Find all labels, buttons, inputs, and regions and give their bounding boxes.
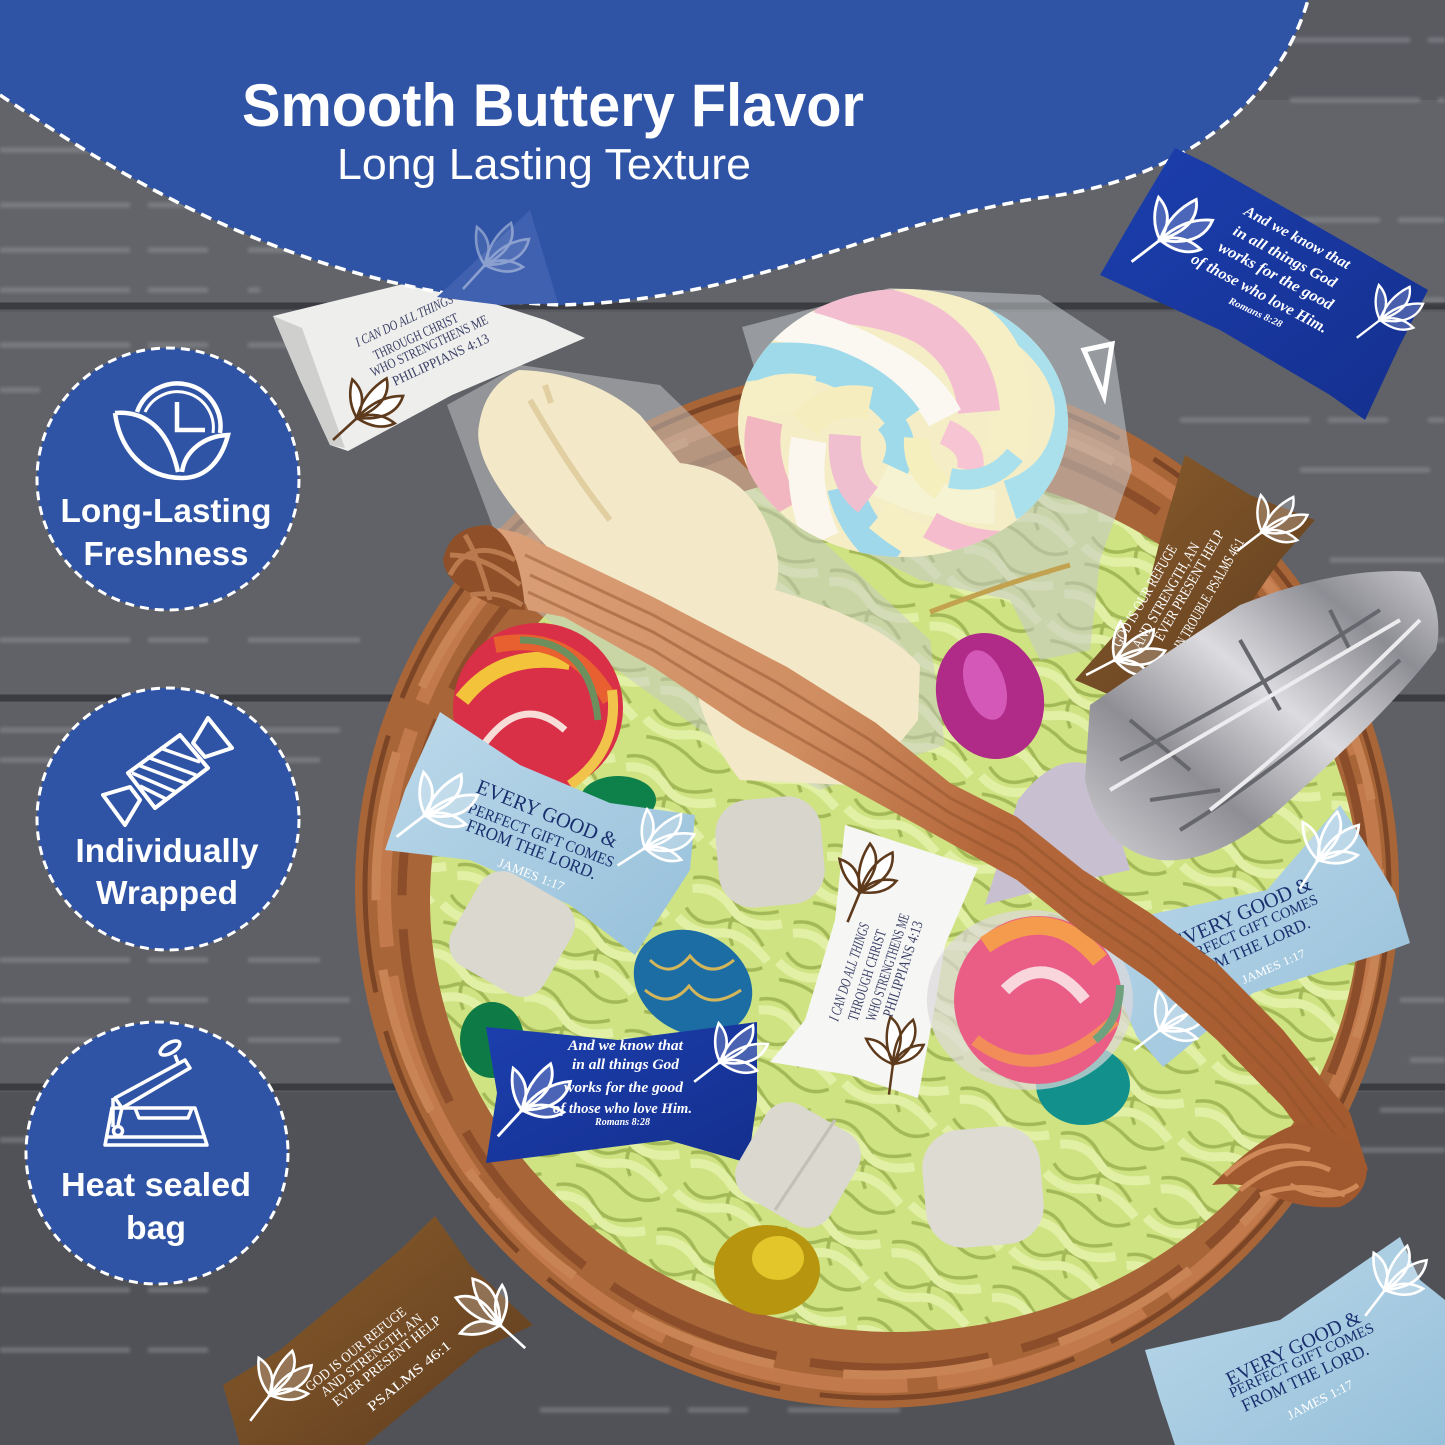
pink lollipop in wrap (927, 910, 1133, 1090)
brown candy bottom left: EVER PRESENT HELP (330, 1313, 445, 1410)
white candy top left: WHO STRENGTHENS ME (368, 313, 491, 381)
light blue candy: right: PERFECT GIFT COMES (1177, 892, 1321, 968)
white candy: I can do all things: THROUGH CHRIST (846, 928, 890, 1023)
brown candy behind bunny (1075, 455, 1315, 698)
light blue candy: Every good: JAMES 1:17 (496, 855, 567, 894)
light blue candy bottom right: PERFECT GIFT COMES (1227, 1320, 1377, 1402)
light blue candy bottom right: FROM THE LORD. (1238, 1339, 1372, 1416)
brown candy behind bunny: IN TROUBLE. PSALMS 46:1 (1172, 536, 1248, 652)
white chocolate bunny in cellophane (447, 365, 945, 790)
dark blue candy top right: And we know that (1240, 203, 1354, 273)
light blue candy: right (1090, 805, 1410, 1067)
label: Long-Lasting (60, 492, 272, 529)
icon: clock leaf (115, 383, 228, 478)
lollipop bag tie (930, 565, 1070, 612)
blue banner (0, 0, 1308, 305)
white soft mint bottom right (919, 1123, 1047, 1251)
light blue candy: right: FROM THE LORD. (1182, 913, 1313, 986)
small green egg (580, 776, 656, 824)
white candy top left (273, 280, 585, 451)
basket rim (355, 368, 1399, 1408)
silver foil bunny (985, 571, 1438, 905)
dark blue candy centre: in all things God (572, 1057, 680, 1073)
subtitle: Long Lasting Texture (337, 140, 751, 189)
white soft mint left (440, 862, 584, 1006)
dark blue candy centre: of those who love Him. (553, 1101, 692, 1117)
badge: long-lasting freshness: Freshness (84, 535, 248, 572)
shredded green paper filling (430, 468, 1360, 1332)
dark blue candy centre: works for the good (564, 1080, 684, 1096)
light blue candy bottom right (1145, 1237, 1445, 1445)
white soft mint bottom centre (726, 1093, 870, 1237)
badge: heat sealed bag: bag (126, 1209, 186, 1246)
label: Individually (76, 832, 259, 869)
light blue candy bottom right: EVERY GOOD & (1223, 1306, 1365, 1390)
green egg by blue candy (460, 1002, 524, 1078)
brown candy behind bunny: AND STRENGTH, AN (1130, 540, 1204, 652)
white candy: I can do all things (770, 825, 978, 1098)
dark blue candy top right (1100, 148, 1428, 420)
brown candy bottom left: AND STRENGTH, AN (318, 1311, 426, 1400)
handle body (497, 528, 1368, 1178)
rainbow lollipop left (453, 623, 623, 793)
twisted marshmallow lollipop (735, 288, 1132, 660)
white candy top left: PHILIPPIANS 4:13 (390, 332, 492, 390)
badge: long-lasting freshness (37, 348, 299, 610)
teal scale egg (614, 909, 772, 1057)
dark blue candy centre: Romans 8:28 (594, 1117, 650, 1128)
faded candy under banner (437, 210, 558, 305)
label: Heat sealed (61, 1166, 251, 1203)
brown candy behind bunny: GOD IS OUR REFUGE (1110, 542, 1181, 650)
dark blue candy top right: in all things God (1230, 223, 1340, 292)
light blue candy: Every good: EVERY GOOD & (473, 774, 621, 853)
white candy top left: THROUGH CHRIST (371, 311, 461, 364)
brown candy bottom left: PSALMS 46:1 (365, 1339, 455, 1415)
badge: individually wrapped (37, 688, 299, 950)
light blue candy: Every good: PERFECT GIFT COMES (466, 800, 616, 871)
lower right knot (1212, 1123, 1367, 1207)
light blue candy: Every good: FROM THE LORD. (464, 815, 600, 883)
white soft mint top (712, 794, 828, 910)
handle strands (525, 555, 1346, 1128)
dark blue candy top right: works for the good (1215, 239, 1337, 314)
light blue candy: right: EVERY GOOD & (1168, 872, 1315, 955)
brown candy bottom left (223, 1216, 533, 1445)
brown candy bottom left: GOD IS OUR REFUGE (303, 1305, 410, 1395)
basket (355, 368, 1399, 1408)
teal foil egg lower right (1036, 1045, 1130, 1125)
dark blue candy top right: of those who love Him. (1188, 251, 1330, 337)
badge: heat sealed bag (26, 1022, 288, 1284)
icon: wrapped candy (103, 718, 232, 825)
light blue candy: Every good (385, 712, 698, 955)
light blue candy bottom right: JAMES 1:17 (1285, 1376, 1356, 1423)
pink foil egg (920, 619, 1060, 773)
top left knot (443, 525, 525, 610)
title: Smooth Buttery Flavor (242, 72, 864, 139)
white candy top left: I CAN DO ALL THINGS (353, 292, 456, 351)
dark blue candy centre: And we know that (567, 1038, 684, 1054)
white candy: I can do all things: WHO STRENGTHENS ME (864, 912, 913, 1023)
white candy: I can do all things: PHILIPPIANS 4:13 (881, 919, 927, 1019)
basket handle (443, 525, 1368, 1207)
dark blue candy centre (486, 1017, 771, 1163)
light blue candy: right: JAMES 1:17 (1240, 946, 1307, 987)
dark blue candy top right: Romans 8:28 (1226, 295, 1284, 330)
icon: heat sealer (105, 1038, 207, 1145)
gold egg (714, 1225, 820, 1315)
white candy: I can do all things: I CAN DO ALL THINGS (826, 921, 873, 1024)
badge: individually wrapped: Wrapped (96, 874, 238, 911)
brown candy behind bunny: EVER PRESENT HELP (1152, 528, 1228, 644)
